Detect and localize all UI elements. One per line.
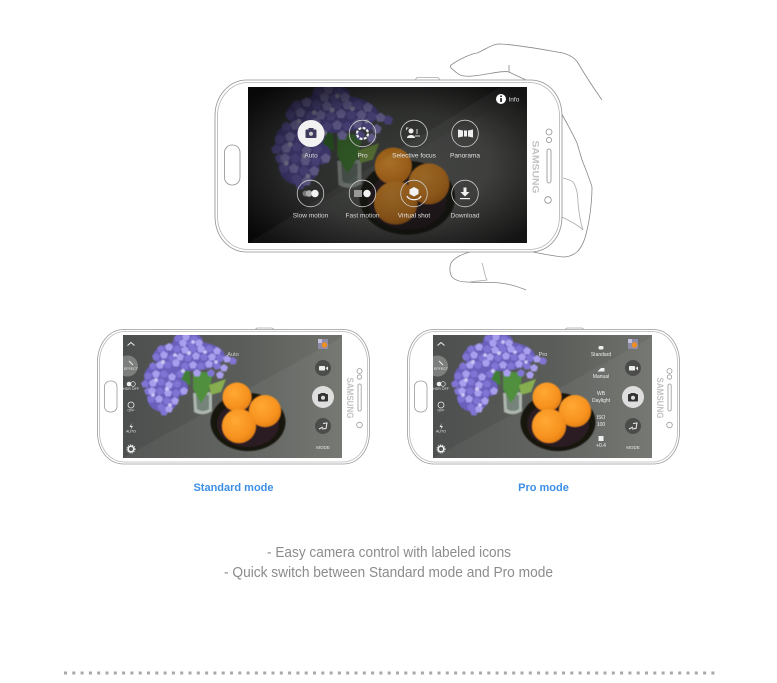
mode: Slow motion (293, 180, 329, 219)
screen: pro camera view (433, 333, 652, 458)
brand: SAMSUNG: SAMSUNG (345, 378, 355, 418)
mode: Panorama (450, 120, 480, 159)
mode: Virtual shot (398, 180, 430, 219)
pro settings column: Daylight (592, 398, 611, 404)
mode: Panorama: Panorama (450, 152, 480, 159)
pro settings column: Standard (591, 352, 611, 358)
panel: pro mode phone (408, 328, 680, 464)
mode: Auto: Auto (304, 152, 318, 159)
screen: pro camera view: Pro (539, 352, 547, 358)
text block: feature list (224, 545, 553, 581)
screen: standard camera view: EFFECT (124, 367, 139, 371)
mode: Virtual shot: Virtual shot (398, 212, 430, 219)
pro settings column: Manual (593, 374, 609, 380)
info button (496, 94, 520, 104)
mode: Download (451, 180, 480, 219)
pro settings column: +0.4 (596, 443, 606, 449)
screen: standard camera view: Auto (227, 352, 239, 358)
mode: Fast motion: Fast motion (346, 212, 380, 219)
phone body (408, 328, 680, 464)
screen: pro camera view: AUTO (436, 430, 446, 434)
mode: Fast motion (346, 180, 380, 219)
phone body (215, 78, 562, 252)
screen: standard camera view: AUTO (126, 430, 136, 434)
caption: Pro mode: Pro mode (518, 482, 569, 494)
screen: standard camera view: HDR OFF (123, 387, 140, 391)
pro settings column: WB (597, 391, 606, 397)
screen: standard camera view: OFF (127, 408, 135, 412)
text block: feature list: - Quick switch between Standard mode and Pro mode (224, 565, 553, 581)
screen: camera mode menu (248, 84, 527, 244)
brand: SAMSUNG: SAMSUNG (655, 378, 665, 418)
mode: Download: Download (451, 212, 480, 219)
screen: standard camera view: MODE (316, 445, 330, 450)
panel: standard mode phone (98, 328, 370, 464)
caption: Standard mode: Standard mode (193, 482, 274, 494)
mode: Slow motion: Slow motion (293, 212, 329, 219)
hand outline (450, 44, 602, 290)
mode: Selective focus: Selective focus (392, 152, 437, 159)
screen: pro camera view: MODE (626, 445, 640, 450)
screen: pro camera view: HDR OFF (433, 387, 450, 391)
panel: main phone held in hand (215, 44, 602, 290)
mode: Pro (349, 120, 376, 159)
mode: Selective focus (392, 120, 437, 159)
text block: feature list: - Easy camera control with labeled icons (267, 545, 511, 561)
phone body (98, 328, 370, 464)
info button: Info (508, 96, 520, 104)
pro settings column: 100 (597, 422, 605, 428)
mode: Auto (298, 120, 324, 159)
pro settings column (591, 346, 611, 449)
brand: SAMSUNG: SAMSUNG (530, 140, 540, 194)
screen: standard camera view (123, 333, 342, 458)
pro settings column: ISO (597, 415, 605, 421)
screen: pro camera view: EFFECT (434, 367, 449, 371)
screen: pro camera view: OFF (437, 408, 445, 412)
mode: Pro: Pro (357, 152, 368, 159)
